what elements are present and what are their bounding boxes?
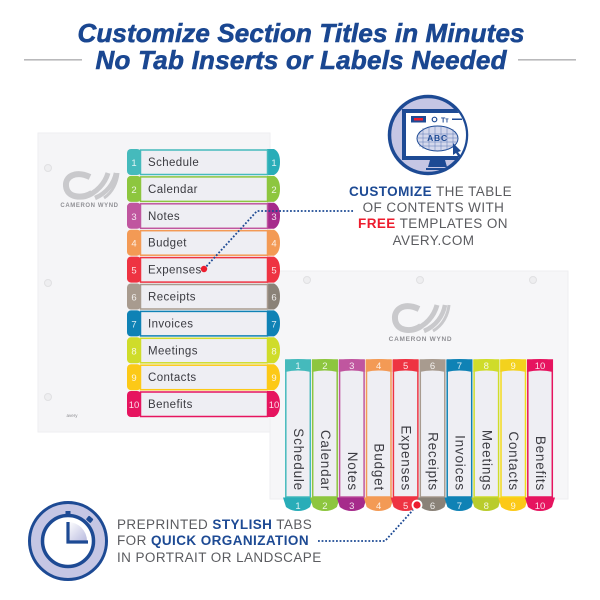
tab column 6: 6 [430, 501, 435, 512]
tab column 6: Receipts [426, 432, 440, 491]
icon: computer with template: Tт [441, 118, 449, 124]
tab row 4: 4 [271, 239, 277, 250]
tab row 8 [127, 337, 280, 363]
title: Customize Section Titles in Minutes [78, 18, 524, 48]
tab row 5: Expenses [148, 265, 202, 277]
text: organization callout: IN PORTRAIT OR LANDSCAPE [117, 550, 322, 565]
panel: portrait divider sheet [38, 133, 270, 432]
tab column 4: 4 [376, 501, 381, 512]
logo: landscape sheet [389, 305, 452, 343]
tab column 7: Invoices [452, 435, 467, 491]
panel: portrait divider sheet: avery [66, 413, 78, 418]
tab column 7 [444, 359, 474, 512]
tab column 9: Contacts [506, 431, 521, 491]
tab column 2: Calendar [318, 430, 333, 491]
tab column 2: 2 [322, 501, 328, 512]
tab row 3: 3 [271, 212, 277, 223]
tab row 1: Schedule [148, 157, 199, 169]
text: customize callout: AVERY.COM [393, 233, 474, 248]
tab column 8 [471, 359, 501, 512]
tab row 4: 4 [131, 239, 137, 250]
tab row 10 [127, 391, 280, 417]
tab row 7: 7 [271, 319, 277, 330]
logo: portrait sheet [60, 173, 119, 209]
tab column 5 [391, 359, 421, 512]
icon: computer with template: ABC [427, 133, 448, 143]
tab column 6: 6 [430, 361, 435, 372]
tab row 6: Receipts [148, 292, 196, 304]
tab row 1: 1 [131, 158, 137, 169]
tab row 4: Budget [148, 238, 187, 250]
tab row 5 [127, 257, 280, 283]
tab column 1: 1 [295, 501, 301, 512]
tab column 1: 1 [295, 361, 301, 372]
callout connector: customize table of contents [201, 211, 354, 272]
tab column 4: 4 [376, 361, 381, 372]
tab column 4: Budget [372, 443, 387, 491]
tab column 1: Schedule [291, 428, 306, 491]
tab column 3: Notes [345, 452, 360, 491]
title: No Tab Inserts or Labels Needed [96, 45, 508, 75]
tab row 8: Meetings [148, 345, 198, 357]
tab row 2: Calendar [148, 184, 198, 196]
tab row 9: 9 [271, 373, 277, 384]
tab column 7: 7 [457, 501, 462, 512]
text: customize callout [349, 184, 512, 248]
tab row 5: 5 [131, 266, 137, 277]
text: customize callout: OF CONTENTS WITH [363, 200, 504, 215]
tab row 10: 10 [129, 400, 139, 411]
tab column 8: 8 [484, 361, 489, 372]
text: organization callout: FOR QUICK ORGANIZATION [117, 533, 309, 548]
tab row 2: 2 [131, 185, 137, 196]
tab row 10: Benefits [148, 399, 193, 411]
tab column 5: 5 [403, 501, 408, 512]
tab column 5: Expenses [399, 425, 414, 491]
tab row 10: 10 [269, 400, 279, 411]
panel: landscape divider sheet [270, 271, 568, 499]
tab row 4 [127, 230, 280, 256]
tab column 1 [283, 359, 313, 512]
tab column 4 [364, 359, 394, 512]
icon: stopwatch [30, 502, 106, 580]
tab row 1 [127, 149, 280, 175]
tab row 9: Contacts [148, 372, 197, 384]
tab row 2 [127, 176, 280, 202]
tab column 2 [310, 359, 340, 512]
tab column 8: Meetings [479, 430, 494, 491]
tab column 3: 3 [349, 501, 354, 512]
tab column 10: Benefits [533, 436, 548, 491]
tab row 6: 6 [131, 292, 137, 304]
tab column 3: 3 [349, 361, 354, 372]
tab row 2: 2 [271, 185, 277, 196]
tabs: portrait rows [127, 149, 280, 417]
tab row 8: 8 [271, 346, 277, 357]
tab row 9 [127, 364, 280, 390]
tab row 9: 9 [131, 373, 137, 384]
tab column 9 [498, 359, 528, 512]
tab row 1: 1 [271, 158, 277, 169]
text: customize callout: FREE TEMPLATES ON [358, 216, 508, 231]
tab row 3: Notes [148, 211, 180, 223]
tab column 9: 9 [511, 501, 516, 512]
icon: computer with template [390, 96, 470, 174]
tab column 2: 2 [322, 361, 328, 372]
tab column 10: 10 [535, 361, 545, 372]
tab column 6 [418, 359, 448, 512]
tab row 3 [127, 203, 280, 229]
logo: portrait sheet: CAMERON WYND [60, 203, 119, 209]
tab column 10: 10 [535, 501, 545, 512]
tab row 3: 3 [131, 212, 137, 223]
tab column 5: 5 [403, 361, 408, 372]
logo: landscape sheet: CAMERON WYND [389, 336, 452, 343]
text: customize callout: CUSTOMIZE THE TABLE [349, 184, 512, 199]
tab row 7: Invoices [148, 318, 193, 330]
tab row 6: 6 [271, 292, 277, 304]
text: organization callout: PREPRINTED STYLISH TABS [117, 517, 312, 532]
callout connector: quick organization [318, 500, 422, 541]
tab row 7: 7 [131, 319, 137, 330]
tab row 7 [127, 310, 280, 336]
tab column 10 [525, 359, 555, 512]
tabs: landscape columns [283, 359, 555, 512]
text: organization callout [117, 517, 322, 565]
tab row 6 [127, 284, 280, 310]
tab column 3 [337, 359, 367, 512]
tab column 9: 9 [511, 361, 516, 372]
tab row 8: 8 [131, 346, 137, 357]
title [24, 18, 576, 75]
tab column 7: 7 [457, 361, 462, 372]
tab row 5: 5 [271, 266, 277, 277]
tab column 8: 8 [484, 501, 489, 512]
